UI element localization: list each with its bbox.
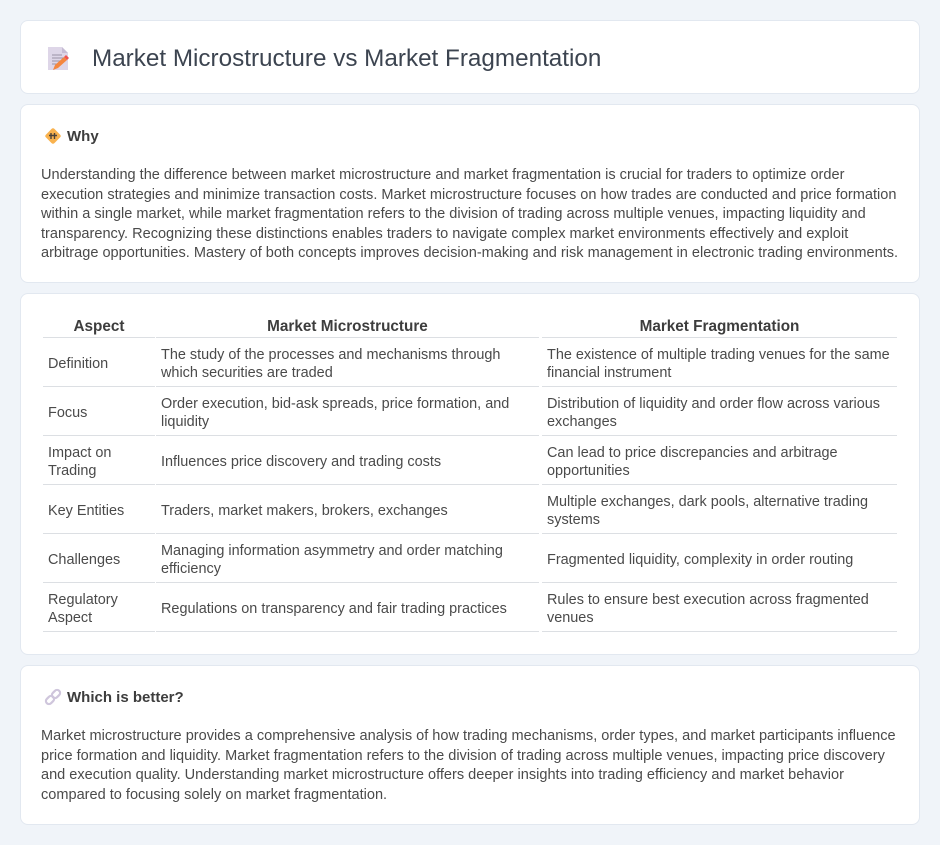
table header: Market Fragmentation [640,318,799,335]
row: regulatory aspect: venues [547,610,594,626]
panel: comparison table [20,293,920,655]
heading: why: Why [67,128,99,145]
panel: why [20,104,920,283]
row: regulatory aspect: Rules to ensure best execution across fragmented [547,592,869,608]
row: challenges: Challenges [48,552,120,568]
row: regulatory aspect: Aspect [48,610,92,626]
table header: Market Microstructure [267,318,428,335]
row: definition: financial instrument [547,365,671,381]
row: regulatory aspect [48,592,869,626]
text: why paragraph: transparency. Recognizing these distinctions enables traders to navigate complex market environments effectively and exploit [41,226,848,242]
text: which is better paragraph: price formation and liquidity. Market fragmentation refers to the division of trading across multiple venues, impacting price discovery [41,748,885,764]
row: definition: The study of the processes and mechanisms through [161,347,500,363]
text: why paragraph: Understanding the difference between market microstructure and market fragmentation is crucial for traders to optimize order [41,167,844,183]
text: which is better paragraph [41,728,896,803]
text: why paragraph [41,167,898,261]
row: impact on trading: Influences price discovery and trading costs [161,454,441,470]
row: impact on trading: opportunities [547,463,630,479]
row: regulatory aspect: Regulations on transparency and fair trading practices [161,601,507,617]
row: key entities [48,494,868,528]
row: impact on trading: Trading [48,463,96,479]
row: key entities: Traders, market makers, brokers, exchanges [161,503,448,519]
row: key entities: systems [547,512,600,528]
icon: warning diamond [45,128,61,144]
table header [73,318,799,335]
icon: document with pencil [48,47,69,70]
row: key entities: Multiple exchanges, dark pools, alternative trading [547,494,868,510]
title: Market Microstructure vs Market Fragmentation [92,45,601,72]
row: focus: liquidity [161,414,209,430]
row: impact on trading: Can lead to price discrepancies and arbitrage [547,445,838,461]
row: focus: Distribution of liquidity and order flow across various [547,396,880,412]
row: focus [48,396,880,430]
heading: which is better: Which is better? [67,689,184,706]
row: definition [48,347,890,381]
row: definition: The existence of multiple trading venues for the same [547,347,890,363]
row: impact on trading: Impact on [48,445,111,461]
panel: title header [20,20,920,94]
text: why paragraph: within a single market, while market fragmentation refers to the division of trading across multiple venues, impacting liquidity and [41,206,866,222]
row: regulatory aspect: Regulatory [48,592,118,608]
row: focus: Order execution, bid-ask spreads, price formation, and [161,396,509,412]
panel: which is better [20,665,920,825]
text: which is better paragraph: compared to focusing solely on market fragmentation. [41,787,387,803]
row: definition: Definition [48,356,108,372]
row: challenges: efficiency [161,561,221,577]
table header: Aspect [73,318,124,335]
row: impact on trading [48,445,838,479]
text: which is better paragraph: Market microstructure provides a comprehensive analysis of how trading mechanisms, order types, and market participants influence [41,728,896,744]
text: why paragraph: execution strategies and minimize transaction costs. Market microstructure focuses on how trades are conducted and price formation [41,187,896,203]
row: focus: exchanges [547,414,617,430]
row: focus: Focus [48,405,87,421]
row: key entities: Key Entities [48,503,124,519]
row: challenges: Fragmented liquidity, complexity in order routing [547,552,853,568]
row: definition: which securities are traded [161,365,333,381]
row: challenges: Managing information asymmetry and order matching [161,543,503,559]
text: which is better paragraph: and execution quality. Understanding market microstructure offers deeper insights into trading efficiency and market behavior [41,767,844,783]
icon: chain link [44,688,62,706]
text: why paragraph: arbitrage opportunities. Mastery of both concepts improves decision-making and risk management in electronic trading environments. [41,245,898,261]
row: challenges [48,543,853,577]
